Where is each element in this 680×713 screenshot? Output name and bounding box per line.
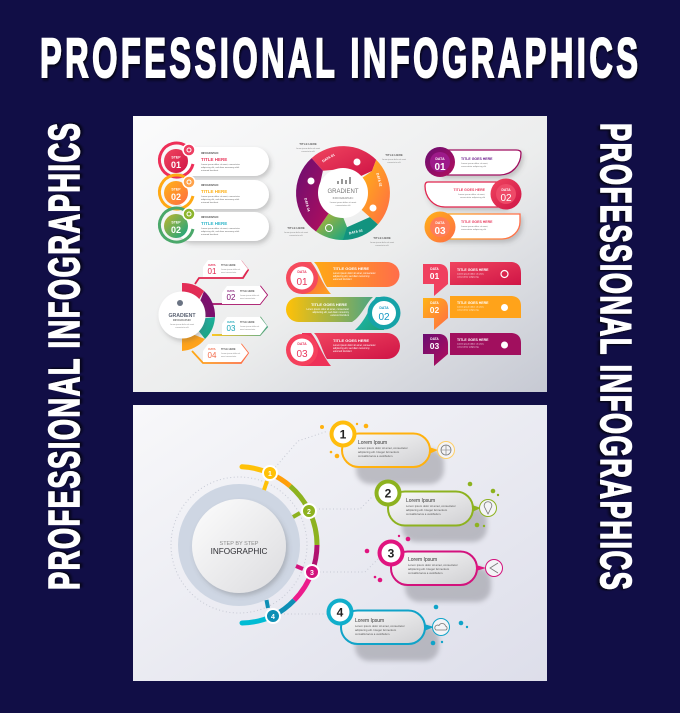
banner 02: adipiscing elit, sed diam nonummy (312, 311, 350, 314)
dots 4 (431, 605, 468, 645)
flag 01: Lorem ipsum dolor sit amet, (457, 272, 484, 276)
banner 02: euismod tincidunt (330, 314, 349, 317)
callouts: consectetur elit (289, 234, 303, 237)
data 02 (425, 178, 522, 210)
callouts: TITLE HERE (287, 226, 305, 230)
flag 02: Lorem ipsum dolor sit amet, (457, 306, 484, 308)
callouts: Lorem ipsum dolor sit amet (382, 158, 407, 161)
node 3: 3 (310, 570, 314, 577)
flag 01: TITLE GOES HERE (457, 268, 489, 272)
step card 4: Lorem Ipsum (355, 618, 384, 624)
flag 02 (423, 296, 521, 330)
tag 04: amet consectetur (221, 355, 237, 358)
banner 01: Lorem ipsum dolor sit amet, consectetur (333, 272, 376, 275)
tag 01: 01 (208, 267, 217, 276)
step card 3 (378, 540, 502, 602)
left vertical heading: PROFESSIONAL INFOGRAPHICS (39, 123, 89, 590)
tag 04 (208, 347, 241, 360)
connector dots (171, 431, 378, 614)
banner 02: DATA (379, 306, 389, 310)
step card 1: Lorem Ipsum (358, 440, 387, 446)
banner 03: adipiscing elit, sed diam nonummy (333, 347, 370, 350)
node 1 (263, 466, 277, 480)
centre disc: GRADIENT (168, 313, 196, 319)
ribbon banners (286, 262, 400, 366)
data 01: TITLE GOES HERE (461, 157, 493, 161)
callouts: TITLE HERE (373, 236, 391, 240)
banner 01: adipiscing elit, sed diam nonummy (333, 275, 370, 278)
step card 1: Lorem ipsum dolor sit amet, consectetur (358, 446, 408, 450)
step 02: INFOGRAPHIC (201, 184, 219, 187)
banner 03 (286, 333, 400, 366)
segment labels: DATA 01 (321, 153, 336, 163)
banner 02 (286, 296, 400, 330)
tag 01 (208, 263, 241, 276)
node 2: 2 (307, 509, 311, 516)
tag 04: 04 (208, 351, 217, 360)
title: PROFESSIONAL INFOGRAPHICS (40, 27, 638, 89)
flag 01 (423, 262, 521, 296)
step 03: STEP (171, 220, 181, 224)
donut chart (284, 142, 407, 247)
tag 04: TITLE HERE (221, 348, 236, 351)
step card 1: convallis lacus a vestibulum. (358, 454, 394, 458)
segment labels: DATA 04 (303, 197, 311, 212)
data 02: 02 (500, 193, 512, 204)
step 02: STEP (171, 188, 181, 192)
panel: gradient infographic set (133, 116, 547, 392)
panel: step by step infographic (133, 405, 547, 681)
segment labels: DATA 03 (349, 229, 363, 235)
flag 03: TITLE GOES HERE (457, 338, 489, 342)
step 02: 02 (171, 192, 181, 202)
flag 03: DATA (430, 337, 439, 341)
segment icons (308, 158, 376, 232)
step 02: TITLE HERE (201, 189, 227, 194)
donut centre: consectetur elit (336, 204, 351, 207)
data 03: TITLE GOES HERE (461, 220, 493, 224)
callouts: Lorem ipsum dolor sit amet (296, 147, 321, 150)
dots 2 (468, 482, 499, 527)
node 4 (266, 609, 280, 623)
flag 03: consectetur adipiscing (457, 346, 479, 348)
step card 4: adipiscing elit. Integer fermentum (355, 628, 397, 632)
circular badge: INFOGRAPHIC (211, 547, 268, 556)
flag 02: consectetur adipiscing (457, 308, 479, 312)
step 01: STEP (171, 156, 181, 160)
step 03: euismod tincidunt. (201, 233, 219, 236)
step card 3: adipiscing elit. Integer fermentum (408, 567, 450, 571)
arrow tags (192, 261, 267, 363)
data 01: Lorem ipsum dolor sit amet, (461, 162, 488, 165)
flag 01: 01 (430, 271, 439, 281)
donut centre: GRADIENT (327, 189, 359, 195)
tag 02: Lorem ipsum dolor sit (240, 294, 260, 297)
step 02: euismod tincidunt. (201, 201, 219, 204)
step 01: TITLE HERE (201, 157, 227, 162)
step 03: 02 (171, 225, 181, 235)
callouts: Lorem ipsum dolor sit amet (370, 241, 395, 244)
flag 01: DATA (430, 267, 439, 271)
step card 2: convallis lacus a vestibulum. (406, 512, 442, 516)
banner 03: Lorem ipsum dolor sit amet, consectetur (333, 344, 376, 347)
step 01 (159, 143, 269, 177)
step 01: INFOGRAPHIC (201, 152, 219, 155)
centre disc (158, 292, 206, 338)
tag 03: DATA (227, 320, 235, 324)
banner 03: DATA (297, 342, 307, 346)
data 03: Lorem ipsum dolor sit amet, (461, 225, 488, 228)
tag 01: DATA (208, 263, 216, 267)
ring segments (182, 283, 204, 313)
node 3 (305, 565, 319, 579)
step card 2: Lorem ipsum dolor sit amet, consectetur (406, 504, 456, 508)
data 03 (424, 212, 520, 242)
banner 02: Lorem ipsum dolor sit amet, consectetur (306, 308, 349, 311)
step card 1 (330, 420, 454, 484)
centre disc: INFOGRAPHIC (173, 318, 191, 322)
step 03: Lorem ipsum dolor sit amet, consectetur (201, 227, 240, 230)
tag 02: DATA (227, 289, 235, 293)
step 03: TITLE HERE (201, 221, 227, 226)
tag 01: TITLE HERE (221, 264, 236, 267)
step card 4 (326, 598, 450, 661)
flag 02: 02 (430, 305, 439, 315)
data 01 (425, 147, 521, 177)
tag 01: amet consectetur (221, 271, 237, 274)
banner 01: TITLE GOES HERE (333, 266, 369, 271)
right vertical heading: PROFESSIONAL INFOGRAPHICS (591, 123, 641, 590)
tag 02: amet consectetur (240, 297, 256, 300)
banner 01: euismod tincidunt (333, 278, 352, 281)
tag 04: Lorem ipsum dolor sit (221, 352, 241, 355)
step card 2: adipiscing elit. Integer fermentum (406, 508, 448, 512)
centre disc: Lorem ipsum dolor sit amet (170, 323, 195, 326)
tag 03: Lorem ipsum dolor sit (240, 325, 260, 328)
segment labels: DATA 02 (375, 172, 383, 187)
data 03: DATA (435, 221, 445, 225)
step list (159, 143, 269, 242)
tag 02: TITLE HERE (240, 290, 255, 293)
tag 04: DATA (208, 347, 216, 351)
radial arrow diagram (158, 260, 267, 363)
flag 03 (423, 333, 521, 366)
flag 02: TITLE GOES HERE (457, 301, 489, 305)
banner 01 (286, 262, 400, 294)
flag 01: consectetur adipiscing (457, 276, 479, 278)
step card 3: Lorem ipsum dolor sit amet, consectetur (408, 563, 458, 567)
centre disc: consectetur elit (175, 326, 189, 329)
data 02: Lorem ipsum dolor sit amet, (458, 193, 485, 196)
flag tags (423, 262, 521, 366)
node 1: 1 (268, 471, 272, 478)
step 01: euismod tincidunt. (201, 169, 219, 172)
step 02: Lorem ipsum dolor sit amet, consectetur (201, 195, 240, 198)
data 01: DATA (435, 157, 445, 161)
tag 01: Lorem ipsum dolor sit (221, 268, 241, 271)
tag 03: 03 (227, 324, 236, 333)
callouts: consectetur elit (375, 244, 389, 247)
callouts: Lorem ipsum dolor sit amet (284, 231, 309, 234)
banner 03: 03 (296, 349, 308, 360)
step card 4: 4 (337, 606, 344, 620)
callouts: consectetur elit (301, 150, 315, 153)
node 2 (302, 504, 316, 518)
donut centre: Lorem ipsum dolor sit amet (330, 201, 357, 204)
step 01: adipiscing elit, sed diam nonummy nibh (201, 166, 240, 169)
callouts: TITLE HERE (385, 153, 403, 157)
banner 03: euismod tincidunt (333, 350, 352, 353)
step card 1: 1 (340, 428, 347, 442)
data 02: TITLE GOES HERE (453, 188, 486, 192)
data 03: consectetur adipiscing elit (461, 228, 486, 231)
step card 4: convallis lacus a vestibulum. (355, 632, 391, 636)
step 01: Lorem ipsum dolor sit amet, consectetur (201, 163, 240, 166)
banner 01: 01 (296, 277, 308, 288)
node 4: 4 (271, 614, 275, 621)
progress arc (242, 467, 317, 623)
banner 01: DATA (297, 270, 307, 274)
flag 03: 03 (430, 341, 439, 351)
step card 1: adipiscing elit. Integer fermentum (358, 450, 400, 454)
data cards (424, 147, 522, 242)
dots 3 (365, 535, 410, 582)
step card 3: convallis lacus a vestibulum. (408, 571, 444, 575)
step 03: adipiscing elit, sed diam nonummy nibh (201, 230, 240, 233)
step 03: INFOGRAPHIC (201, 216, 219, 219)
banner 03: TITLE GOES HERE (333, 338, 369, 343)
data 01: 01 (434, 162, 446, 173)
banner 02: TITLE GOES HERE (311, 302, 347, 307)
step 02: adipiscing elit, sed diam nonummy nibh (201, 198, 240, 201)
tag 02 (227, 289, 260, 302)
data 02: DATA (501, 188, 511, 192)
step card 2: Lorem Ipsum (406, 498, 435, 504)
segment labels (303, 153, 383, 235)
callouts (284, 142, 407, 247)
data 03: 03 (434, 226, 446, 237)
tag 03 (227, 320, 260, 333)
donut centre: INFOGRAPHIC (333, 196, 354, 200)
step 02 (159, 175, 269, 209)
callouts: consectetur elit (387, 161, 401, 164)
step card 2 (374, 480, 496, 542)
step card 3: 3 (388, 546, 395, 560)
flag 03: Lorem ipsum dolor sit amet, (457, 342, 484, 346)
tag 03: TITLE HERE (240, 321, 255, 324)
tag 03: amet consectetur (240, 328, 256, 331)
banner 02: 02 (378, 312, 390, 323)
step card 3: Lorem Ipsum (408, 557, 437, 563)
donut centre (318, 168, 368, 218)
step 03 (159, 208, 269, 242)
step 01: 01 (171, 160, 181, 170)
circular badge: STEP BY STEP (220, 541, 259, 547)
dots 1 (320, 423, 368, 458)
callouts: TITLE HERE (299, 142, 317, 146)
flag 02: DATA (430, 301, 439, 305)
tag 02: 02 (227, 293, 236, 302)
step card 2: 2 (385, 486, 392, 500)
step card 4: Lorem ipsum dolor sit amet, consectetur (355, 624, 405, 628)
data 02: consectetur adipiscing elit (460, 196, 485, 199)
data 01: consectetur adipiscing elit (461, 165, 486, 168)
circular badge (178, 484, 300, 606)
